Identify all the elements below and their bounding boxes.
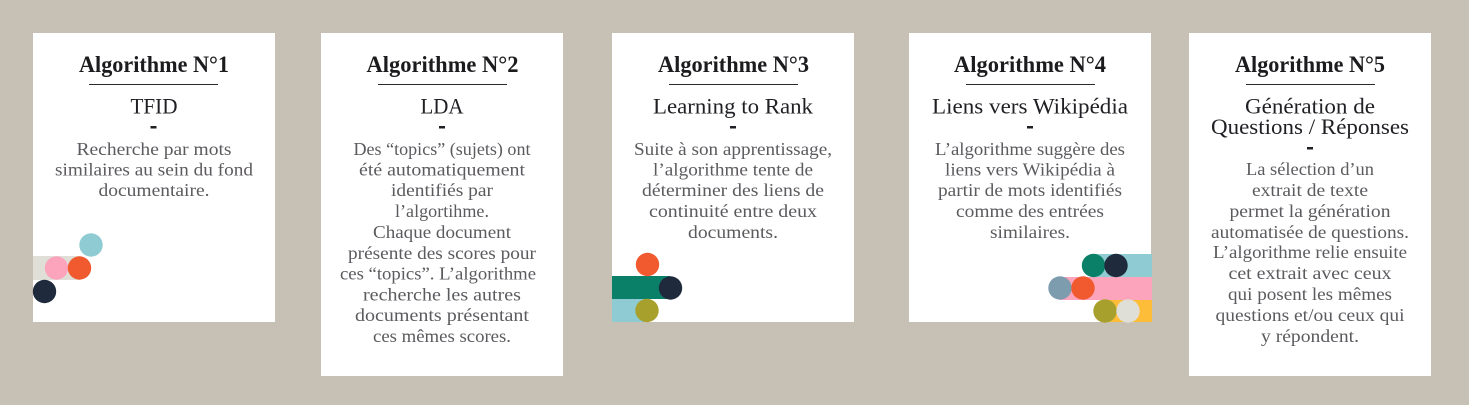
panel: algorithme 1 bbox=[33, 33, 275, 322]
text block: description 4: liens vers Wikipédia à bbox=[945, 160, 1115, 180]
text block: description 3: documents. bbox=[688, 222, 778, 242]
text block: description 2: l’algortihme. bbox=[395, 201, 489, 221]
panel: algorithme 3 bbox=[612, 33, 854, 322]
icon: decorative dots 1 bbox=[33, 233, 103, 303]
heading: algorithme 4: Algorithme N°4 bbox=[954, 52, 1106, 77]
text block: description 1: documentaire. bbox=[98, 180, 210, 200]
text block: description 1: similaires au sein du fond bbox=[55, 160, 253, 180]
dash separator 4 bbox=[1027, 126, 1033, 128]
dash separator 5 bbox=[1307, 147, 1313, 150]
text block: description 5: cet extrait avec ceux bbox=[1228, 263, 1392, 283]
subtitle: Génération de Questions / Réponses: Questions / Réponses bbox=[1211, 114, 1409, 139]
dash separator 1 bbox=[150, 126, 156, 128]
subtitle: Génération de Questions / Réponses bbox=[1211, 94, 1409, 139]
heading: algorithme 2: Algorithme N°2 bbox=[366, 52, 518, 77]
text block: description 3: continuité entre deux bbox=[649, 201, 817, 221]
text block: description 5: extrait de texte bbox=[1252, 180, 1368, 200]
text block: description 3 bbox=[634, 139, 832, 242]
panel: algorithme 2 bbox=[321, 33, 563, 376]
text block: description 3: l’algorithme tente de bbox=[653, 160, 813, 180]
dash separator 3 bbox=[730, 126, 736, 128]
text block: description 5: La sélection d’un bbox=[1246, 159, 1374, 179]
text block: description 5: questions et/ou ceux qui bbox=[1216, 305, 1404, 325]
text block: description 5: y répondent. bbox=[1261, 326, 1359, 346]
text block: description 2: Chaque document bbox=[373, 222, 511, 242]
text block: description 4: L’algorithme suggère des bbox=[935, 139, 1125, 159]
text block: description 2: présente des scores pour bbox=[348, 243, 536, 263]
heading: algorithme 3: Algorithme N°3 bbox=[658, 52, 809, 77]
subtitle: TFID: TFID bbox=[130, 94, 178, 118]
heading: algorithme 5: Algorithme N°5 bbox=[1235, 52, 1385, 77]
subtitle: Génération de Questions / Réponses: Génération de bbox=[1245, 94, 1375, 118]
text block: description 2: été automatiquement bbox=[359, 160, 525, 180]
text block: description 1: Recherche par mots bbox=[76, 139, 232, 159]
text block: description 5: permet la génération bbox=[1230, 201, 1390, 221]
icon: decorative dots 3 bbox=[612, 253, 682, 322]
subtitle: Liens vers Wikipédia: Liens vers Wikipédia bbox=[932, 94, 1128, 118]
text block: description 5: L’algorithme relie ensuite bbox=[1213, 242, 1407, 262]
text block: description 2 bbox=[340, 139, 536, 346]
text block: description 5: automatisée de questions. bbox=[1211, 222, 1409, 242]
text block: description 4 bbox=[935, 139, 1125, 242]
text block: description 3: déterminer des liens de bbox=[642, 180, 824, 200]
subtitle: LDA: LDA bbox=[420, 94, 464, 118]
text block: description 5 bbox=[1211, 159, 1409, 346]
panel: algorithme 4 bbox=[909, 33, 1152, 323]
text block: description 2: documents présentant bbox=[355, 305, 529, 325]
text block: description 5: qui posent les mêmes bbox=[1228, 284, 1392, 304]
text block: description 2: identifiés par bbox=[391, 180, 493, 200]
subtitle: Learning to Rank: Learning to Rank bbox=[653, 94, 813, 118]
text block: description 4: similaires. bbox=[990, 222, 1070, 242]
dash separator 2 bbox=[439, 126, 445, 128]
text block: description 4: partir de mots identifiés bbox=[938, 180, 1122, 200]
text block: description 1 bbox=[55, 139, 253, 200]
text block: description 2: Des “topics” (sujets) ont bbox=[354, 139, 530, 160]
text block: description 4: comme des entrées bbox=[956, 201, 1104, 221]
text block: description 2: ces mêmes scores. bbox=[373, 326, 511, 346]
text block: description 3: Suite à son apprentissage, bbox=[634, 139, 832, 159]
icon: decorative dots 4 bbox=[1048, 254, 1152, 323]
heading: algorithme 1: Algorithme N°1 bbox=[79, 52, 229, 77]
panel: algorithme 5 bbox=[1189, 33, 1431, 376]
text block: description 2: recherche les autres bbox=[363, 284, 521, 304]
text block: description 2: ces “topics”. L’algorithme bbox=[340, 264, 536, 284]
